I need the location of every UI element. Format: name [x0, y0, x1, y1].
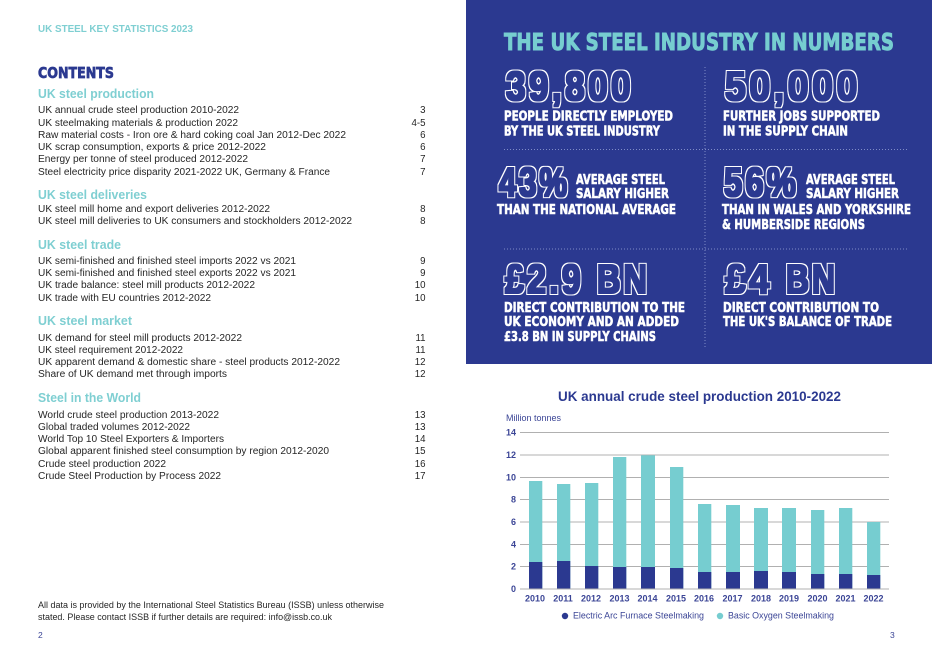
axis unit: Million tonnes	[506, 413, 561, 423]
section: UK steel production: Energy per tonne of steel produced 2012-2022	[38, 154, 248, 165]
stat: economy contribution: UK ECONOMY AND AN ADDED	[504, 315, 679, 330]
y axis labels: 2	[511, 562, 516, 572]
x axis labels: 2015	[666, 594, 686, 604]
section: UK steel production: UK steelmaking materials & production 2022	[38, 118, 238, 129]
x axis labels: 2014	[637, 594, 658, 604]
y axis labels: 12	[506, 450, 516, 460]
section: Steel in the World: Steel in the World	[38, 391, 141, 405]
footnote: All data is provided by the International Steel Statistics Bureau (ISSB) unless otherwise	[38, 600, 384, 610]
section: UK steel market: UK steel requirement 2012-2022	[38, 345, 183, 356]
section: UK steel production: 7	[420, 154, 426, 165]
footnote: stated. Please contact ISSB if further details are required: info@issb.co.uk	[38, 612, 332, 622]
stat: economy contribution: £2.9	[505, 256, 584, 302]
legend	[562, 610, 834, 620]
stat: further jobs: FURTHER JOBS SUPPORTED	[723, 110, 880, 124]
panel: UK steel industry in numbers	[466, 0, 932, 364]
y axis labels: 6	[511, 517, 516, 527]
section: UK steel trade: UK semi-finished and finished steel imports 2022 vs 2021	[38, 256, 296, 267]
section: UK steel production: 3	[420, 105, 426, 116]
section: Steel in the World: 15	[415, 446, 426, 457]
x axis labels: 2017	[722, 594, 743, 604]
section: UK steel production: 6	[420, 130, 426, 141]
legend: Electric Arc Furnace Steelmaking	[573, 610, 704, 620]
bar chart: UK annual crude steel production	[506, 389, 889, 620]
section: UK steel market: UK demand for steel mill products 2012-2022	[38, 333, 242, 344]
x axis labels: 2016	[694, 594, 714, 604]
y axis labels: 14	[506, 428, 516, 438]
section: UK steel trade: 9	[420, 268, 426, 279]
section: UK steel production: UK scrap consumption, exports & price 2012-2022	[38, 142, 266, 153]
section: UK steel market: 11	[415, 345, 426, 356]
section: UK steel market: 11	[415, 333, 426, 344]
section: Steel in the World: 17	[415, 471, 426, 482]
section: Steel in the World: 13	[415, 422, 426, 433]
y axis labels: 4	[511, 540, 516, 550]
y axis labels: 0	[511, 584, 516, 594]
contents panel	[38, 64, 426, 482]
stat: economy contribution: £3.8 BN IN SUPPLY CHAINS	[504, 330, 656, 345]
section: UK steel trade: UK semi-finished and finished steel exports 2022 vs 2021	[38, 268, 296, 279]
y axis labels: 10	[506, 472, 516, 482]
section: UK steel production: 4-5	[411, 118, 426, 129]
stat: economy contribution	[504, 256, 685, 345]
section: UK steel deliveries: UK steel mill home and export deliveries 2012-2022	[38, 204, 270, 215]
stat: employees: PEOPLE DIRECTLY EMPLOYED	[504, 110, 673, 124]
legend: Basic Oxygen Steelmaking	[728, 610, 834, 620]
section: UK steel market: Share of UK demand met through imports	[38, 369, 227, 380]
x axis labels: 2021	[835, 594, 856, 604]
stat: 56 percent: 56%	[724, 159, 799, 205]
stat: 43 percent: 43%	[499, 159, 570, 205]
section: Steel in the World: 13	[415, 410, 426, 421]
section: UK steel market: 12	[415, 357, 426, 368]
stat: 43 percent: SALARY HIGHER	[576, 187, 669, 202]
x axis labels: 2012	[581, 594, 601, 604]
x axis labels: 2018	[751, 594, 771, 604]
stat: 56 percent: AVERAGE STEEL	[806, 173, 895, 188]
page header: UK STEEL KEY STATISTICS 2023	[38, 24, 193, 35]
stat: employees	[504, 63, 673, 140]
section: Steel in the World	[38, 391, 426, 482]
stat: balance of trade: £4	[725, 256, 773, 302]
stat: 56 percent: SALARY HIGHER	[806, 187, 899, 202]
section: UK steel market: UK steel market	[38, 314, 133, 328]
section: UK steel trade: 9	[420, 256, 426, 267]
stat: 56 percent	[722, 159, 911, 233]
section: Steel in the World: 14	[415, 434, 426, 445]
section: UK steel trade: 10	[415, 280, 426, 291]
stat: 43 percent	[497, 159, 676, 218]
x axis labels: 2013	[609, 594, 630, 604]
x axis labels: 2020	[807, 594, 828, 604]
y axis labels	[506, 428, 516, 594]
stat: 56 percent: & HUMBERSIDE REGIONS	[722, 218, 865, 233]
stat: balance of trade: DIRECT CONTRIBUTION TO	[723, 301, 879, 316]
section: UK steel deliveries: UK steel deliveries	[38, 188, 147, 202]
section: UK steel market: UK apparent demand & domestic share - steel products 2012-2022	[38, 357, 340, 368]
section: Steel in the World: World Top 10 Steel Exporters & Importers	[38, 434, 224, 445]
section: UK steel production: UK annual crude steel production 2010-2022	[38, 105, 239, 116]
contents heading: CONTENTS	[38, 64, 114, 82]
stat: balance of trade	[723, 256, 892, 330]
y axis labels: 8	[511, 494, 516, 504]
stat: further jobs: 50,000	[725, 63, 861, 109]
section: UK steel production: UK steel production	[38, 87, 154, 101]
stat: employees: BY THE UK STEEL INDUSTRY	[504, 124, 660, 140]
x axis labels	[525, 594, 884, 604]
stat: 43 percent: AVERAGE STEEL	[576, 173, 665, 188]
stat: employees: 39,800	[506, 63, 634, 109]
section: Steel in the World: 16	[415, 459, 426, 470]
section: Steel in the World: Crude steel production 2022	[38, 459, 166, 470]
basic oxygen bars	[529, 455, 880, 589]
section: UK steel production: 6	[420, 142, 426, 153]
stat: economy contribution: DIRECT CONTRIBUTION TO THE	[504, 301, 685, 316]
stat: further jobs	[723, 63, 880, 140]
section: UK steel deliveries: UK steel mill deliveries to UK consumers and stockholders 2012-2022	[38, 216, 352, 227]
section: UK steel market	[38, 314, 426, 380]
x axis labels: 2019	[779, 594, 799, 604]
section: UK steel deliveries: 8	[420, 204, 426, 215]
chart title: UK annual crude steel production 2010-2022	[558, 389, 841, 404]
stat: balance of trade: BN	[786, 256, 838, 302]
section: UK steel trade: UK trade with EU countries 2012-2022	[38, 293, 211, 304]
x axis labels: 2010	[525, 594, 545, 604]
section: Steel in the World: World crude steel production 2013-2022	[38, 410, 219, 421]
section: UK steel market: 12	[415, 369, 426, 380]
page number right: 3	[890, 630, 895, 640]
electric arc bars	[529, 561, 880, 589]
section: Steel in the World: Crude Steel Production by Process 2022	[38, 471, 221, 482]
section: UK steel trade: UK steel trade	[38, 238, 121, 252]
section: UK steel trade: 10	[415, 293, 426, 304]
section: UK steel production: Steel electricity price disparity 2021-2022 UK, Germany & France	[38, 167, 330, 178]
section: UK steel production	[38, 87, 426, 178]
section: UK steel deliveries	[38, 188, 426, 227]
section: UK steel production: 7	[420, 167, 426, 178]
section: UK steel trade	[38, 238, 426, 304]
stat: 43 percent: THAN THE NATIONAL AVERAGE	[497, 203, 676, 218]
stat: economy contribution: BN	[597, 256, 650, 302]
section: Steel in the World: Global traded volumes 2012-2022	[38, 422, 190, 433]
footnote	[38, 600, 384, 622]
section: Steel in the World: Global apparent finished steel consumption by region 2012-2020	[38, 446, 330, 457]
page number left: 2	[38, 630, 43, 640]
section: UK steel trade: UK trade balance: steel mill products 2012-2022	[38, 280, 255, 291]
stat: further jobs: IN THE SUPPLY CHAIN	[723, 124, 848, 140]
x axis labels: 2022	[863, 594, 884, 604]
section: UK steel deliveries: 8	[420, 216, 426, 227]
section: UK steel production: Raw material costs - Iron ore & hard coking coal Jan 2012-Dec 2022	[38, 130, 346, 141]
x axis labels: 2011	[553, 594, 573, 604]
